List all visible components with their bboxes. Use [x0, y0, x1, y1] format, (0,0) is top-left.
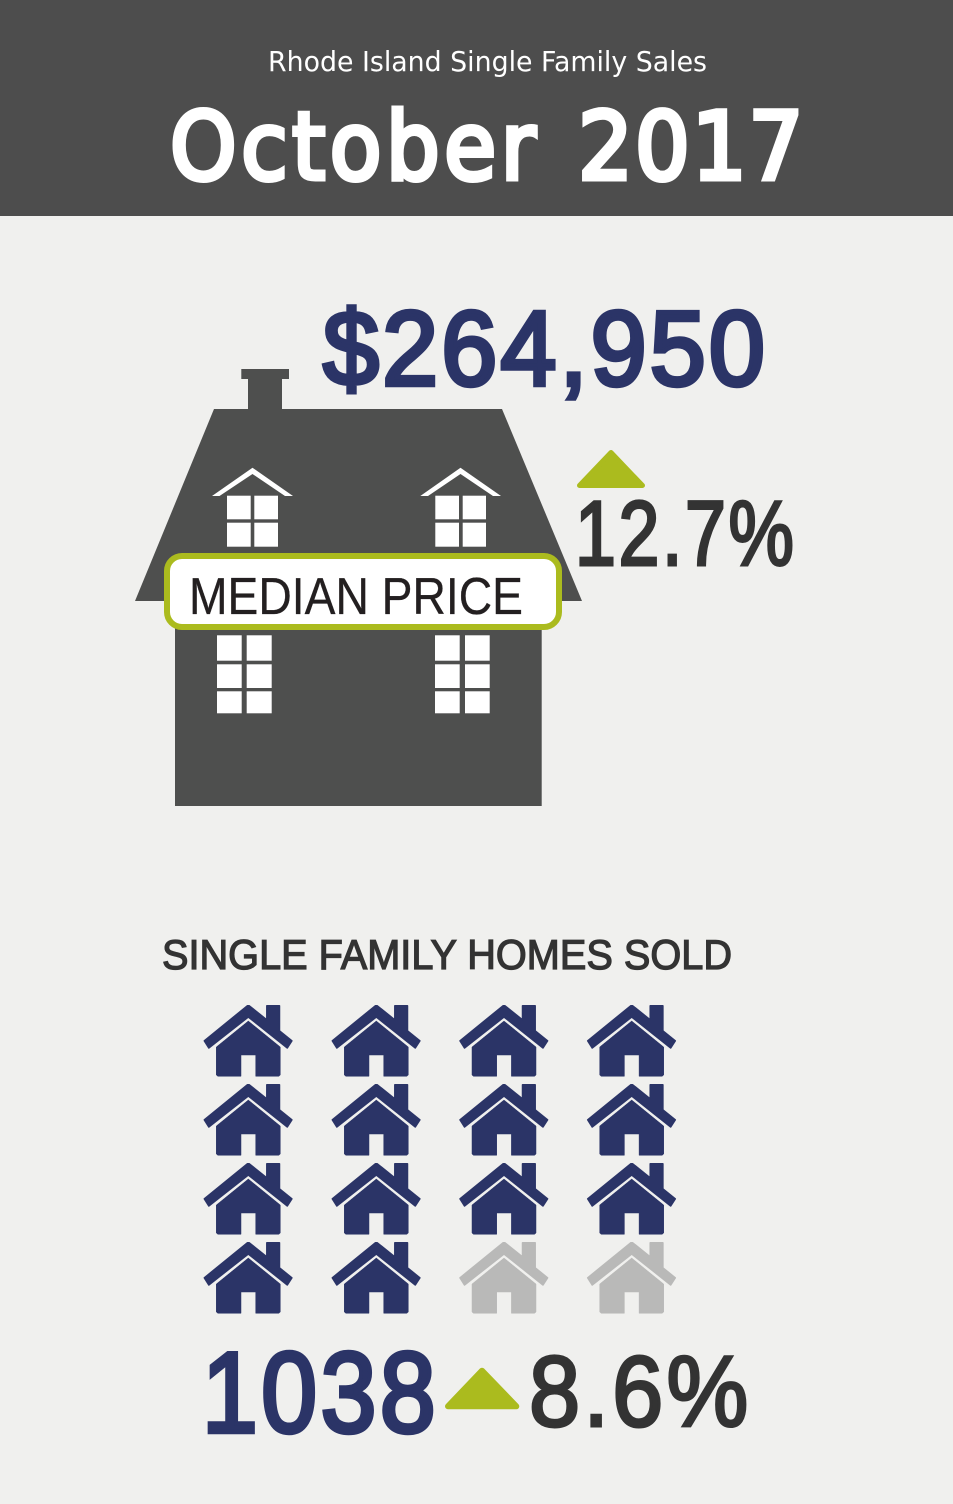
homes sold change: 8.6% — [529, 1336, 752, 1448]
icon: green up triangle for homes sold — [448, 1371, 516, 1406]
dormer window right — [420, 468, 501, 547]
house body — [175, 590, 542, 806]
large house illustration — [135, 369, 582, 806]
homes sold count: 1038 — [202, 1329, 439, 1456]
icon: green up triangle for median price — [580, 452, 642, 486]
homes sold heading: SINGLE FAMILY HOMES SOLD — [162, 931, 732, 978]
roof — [135, 409, 582, 601]
header subtitle: Rhode Island Single Family Sales — [268, 45, 707, 78]
chimney — [241, 369, 289, 410]
header band — [0, 0, 953, 216]
title: October — [170, 93, 540, 202]
median price value: $264,950 — [323, 289, 768, 408]
lower window right — [435, 635, 490, 713]
median price change: 12.7% — [575, 482, 796, 585]
lower window left — [217, 635, 272, 713]
dormer window left — [212, 468, 293, 547]
title — [170, 93, 805, 202]
title: 2017 — [578, 93, 805, 202]
house pictogram grid — [204, 1006, 675, 1313]
median price label: MEDIAN PRICE — [189, 568, 523, 626]
grey house icons — [460, 1243, 675, 1313]
